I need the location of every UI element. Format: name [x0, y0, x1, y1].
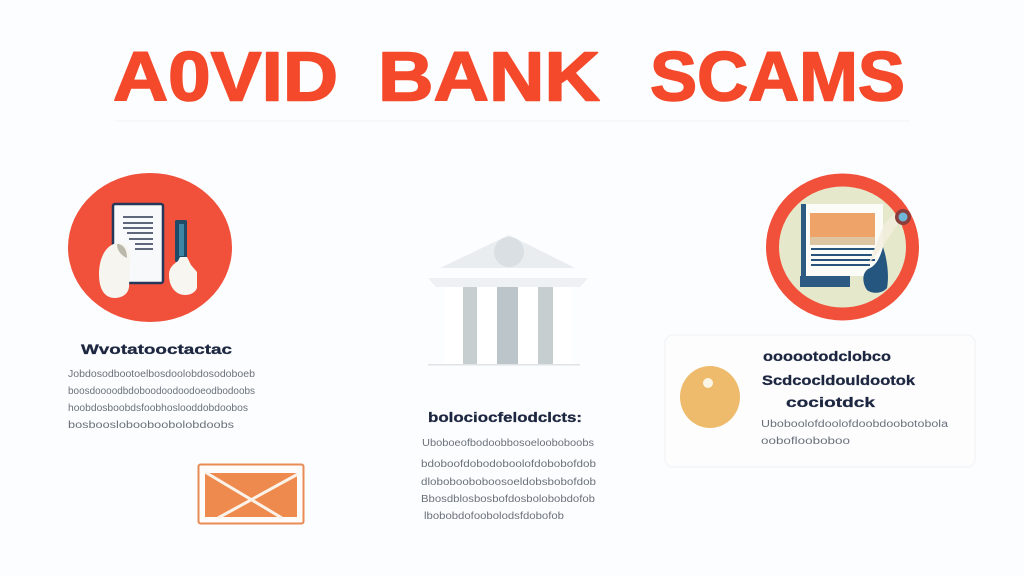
- right body text: [761, 419, 949, 447]
- icon: hands holding document and pen: [68, 173, 232, 322]
- right heading: [762, 348, 915, 410]
- centre body text: Uboboeofbodoobbosoelooboboobs: [422, 438, 594, 449]
- title: SCAMS: [650, 38, 905, 116]
- left body text: hoobdosboobdsfoobhoslooddobdoobos: [68, 403, 248, 414]
- icon: computer screen in ring: [772, 180, 912, 314]
- left body text: [68, 369, 255, 431]
- panel: centre tip: [421, 235, 597, 522]
- left body text: boosdoooodbdoboodoodoodoeodbodoobs: [68, 386, 255, 397]
- title: A0VID: [113, 38, 338, 116]
- left heading: Wvotatooctactac: [81, 341, 232, 357]
- centre body text: Bbosdblosbosbofdosbolobobdofob: [421, 494, 595, 505]
- icon: envelope: [198, 464, 304, 524]
- right body text: Uboboolofdoolofdoobdoobotobola: [761, 419, 949, 430]
- left body text: bosbooslobooboobolobdoobs: [68, 420, 234, 431]
- centre heading: bolociocfelodclcts:: [428, 409, 582, 425]
- right heading: Scdcocldouldootok: [762, 372, 915, 388]
- title: BANK: [378, 38, 600, 116]
- centre body text: dlobobooboboosoeldobsbobofdob: [421, 477, 597, 488]
- centre body text: lbobobdofoobolodsfdobofob: [424, 511, 564, 522]
- right heading: cociotdck: [786, 394, 875, 410]
- panel: left tip: [68, 173, 255, 431]
- panel: right card: [665, 335, 975, 467]
- right heading: oooootodclobco: [763, 348, 891, 364]
- centre body text: bdoboofdobodoboolofdobobofdob: [421, 459, 596, 470]
- left body text: Jobdosodbootoelbosdoolobdosodoboeb: [68, 369, 255, 380]
- right body text: ooboflooboboo: [761, 436, 851, 447]
- icon: bank building: [428, 235, 588, 366]
- icon: orange circle: [680, 366, 740, 428]
- centre body text: [421, 438, 597, 522]
- title: [113, 38, 905, 116]
